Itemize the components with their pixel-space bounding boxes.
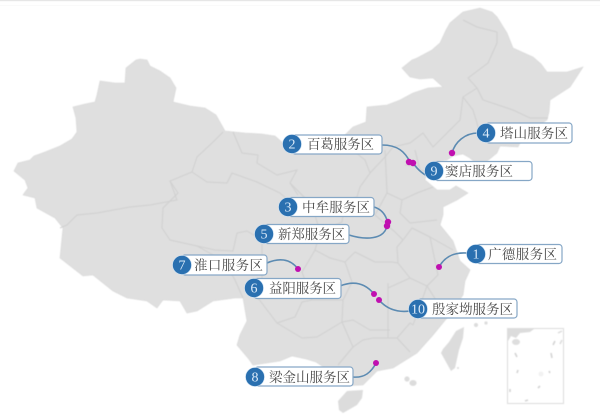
label 4: 塔山服务区: 塔山服务区 bbox=[500, 126, 568, 141]
label 5: 新郑服务区 bbox=[254, 224, 349, 244]
label 8: 梁金山服务区 bbox=[246, 367, 353, 386]
label 2: 百葛服务区 bbox=[282, 134, 382, 154]
label 5: 新郑服务区: 新郑服务区 bbox=[278, 226, 345, 242]
label 5: 新郑服务区: 5 bbox=[260, 228, 268, 242]
label 2: 百葛服务区: 百葛服务区 bbox=[307, 136, 374, 152]
label 10: 殷家坳服务区 bbox=[408, 299, 517, 318]
label 9: 窦店服务区 bbox=[424, 162, 532, 180]
label 1: 广德服务区: 1 bbox=[472, 248, 480, 262]
label 10: 殷家坳服务区: 殷家坳服务区 bbox=[432, 302, 513, 317]
label 8: 梁金山服务区: 梁金山服务区 bbox=[269, 369, 350, 385]
label 4: 塔山服务区: 4 bbox=[482, 126, 490, 142]
Taiwan bbox=[441, 327, 464, 371]
inset: South China Sea bbox=[508, 328, 564, 404]
label 4: 塔山服务区 bbox=[476, 123, 572, 143]
label 1: 广德服务区 bbox=[466, 244, 562, 264]
label 10: 殷家坳服务区: 10 bbox=[411, 302, 425, 318]
label 9: 窦店服务区: 窦店服务区 bbox=[445, 164, 513, 179]
location dots bbox=[295, 150, 455, 366]
label 7: 淮口服务区: 淮口服务区 bbox=[194, 258, 263, 273]
label 7: 淮口服务区: 7 bbox=[178, 258, 186, 274]
label 6: 益阳服务区: 6 bbox=[250, 282, 258, 296]
label 3: 中牟服务区: 中牟服务区 bbox=[302, 199, 370, 215]
label 6: 益阳服务区 bbox=[244, 278, 341, 298]
label 1: 广德服务区: 广德服务区 bbox=[488, 247, 557, 262]
label 2: 百葛服务区: 2 bbox=[288, 138, 296, 152]
connector lines bbox=[267, 133, 478, 377]
province borders bbox=[60, 20, 548, 365]
label 7: 淮口服务区 bbox=[172, 255, 267, 275]
coastal islets bbox=[404, 321, 488, 386]
label 3: 中牟服务区 bbox=[278, 198, 374, 216]
label 8: 梁金山服务区: 8 bbox=[252, 370, 258, 386]
label 6: 益阳服务区: 益阳服务区 bbox=[269, 281, 336, 296]
label 3: 中牟服务区: 3 bbox=[284, 200, 292, 216]
Hainan bbox=[338, 390, 363, 413]
label 9: 窦店服务区: 9 bbox=[430, 164, 438, 180]
